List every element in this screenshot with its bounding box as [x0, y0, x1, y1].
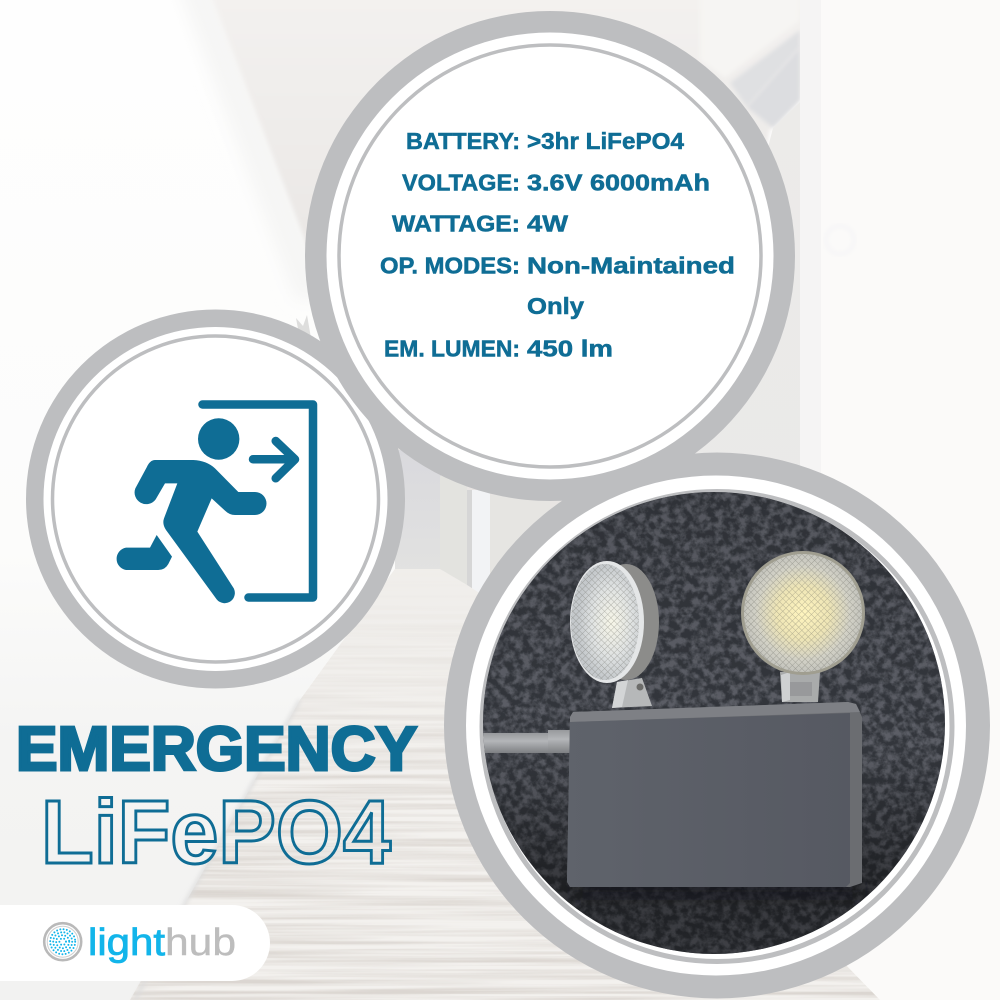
- panel: specifications circle: [305, 11, 795, 501]
- left lamp lens: [570, 561, 644, 683]
- right wall panel: [690, 100, 802, 1000]
- right lamp lens: [741, 551, 865, 675]
- body: [135, 460, 266, 603]
- heading: EMERGENCY: EMERGENCY: [16, 715, 417, 784]
- housing for left lamp: [620, 564, 659, 680]
- right wall light band: [730, 30, 800, 107]
- spec: voltage: [402, 170, 710, 196]
- photo: emergency light on textured wall: [480, 490, 950, 960]
- spec: wattage: [392, 210, 569, 236]
- carpet floor: [100, 560, 900, 1000]
- spec: emergency lumen: EM. LUMEN:: [384, 336, 520, 362]
- conduit: [480, 733, 550, 753]
- wall sensor: [826, 226, 854, 254]
- skirting line: [135, 700, 300, 1000]
- icon: logo mark: [44, 923, 81, 960]
- upper right ceiling highlight: [700, 0, 800, 78]
- spec: voltage: VOLTAGE:: [402, 170, 520, 196]
- panel: exit icon circle: [26, 310, 405, 688]
- spec: operating modes: Non-Maintained: [527, 252, 735, 278]
- right lamp bracket: [780, 672, 820, 702]
- left lamp bracket: [612, 678, 652, 708]
- door frame: [202, 404, 313, 598]
- spec: wattage: 4W: [527, 210, 569, 236]
- head: [198, 418, 239, 460]
- hallway background: [130, 26, 878, 1000]
- spec: emergency lumen: [384, 336, 613, 362]
- junction box: [567, 702, 862, 887]
- panel: product photo circle: [444, 452, 990, 998]
- spec: battery: >3hr LiFePO4: [527, 128, 684, 154]
- right white wall: [821, 0, 1000, 1000]
- logo wordmark: hub: [165, 922, 236, 964]
- corridor door: [440, 476, 467, 586]
- spec: wattage: WATTAGE:: [392, 210, 520, 236]
- right wall dark band: [747, 47, 800, 128]
- logo wordmark: [88, 922, 236, 964]
- heading: LiFePO4 outline: LiFePO4: [41, 783, 391, 883]
- spec: operating modes: OP. MODES:: [380, 252, 520, 278]
- logo: lighthub: [0, 905, 270, 981]
- logo wordmark: light: [88, 922, 165, 964]
- spec: operating modes: [380, 252, 735, 319]
- box shadow: [577, 886, 859, 902]
- plant tip: [296, 315, 311, 340]
- ceiling shading: [175, 0, 335, 300]
- wall column: [800, 0, 821, 1000]
- ceiling: [205, 0, 810, 569]
- spec: operating modes: Only: [527, 293, 584, 319]
- spec: battery: BATTERY:: [406, 128, 520, 154]
- spec: emergency lumen: 450 lm: [527, 336, 613, 362]
- arrow: [253, 441, 295, 478]
- rear leg: [117, 535, 172, 570]
- icon: running person exiting door: [117, 404, 313, 603]
- spec: voltage: 3.6V 6000mAh: [527, 170, 710, 196]
- spec: battery: [406, 128, 684, 154]
- corridor end wall: [395, 450, 441, 575]
